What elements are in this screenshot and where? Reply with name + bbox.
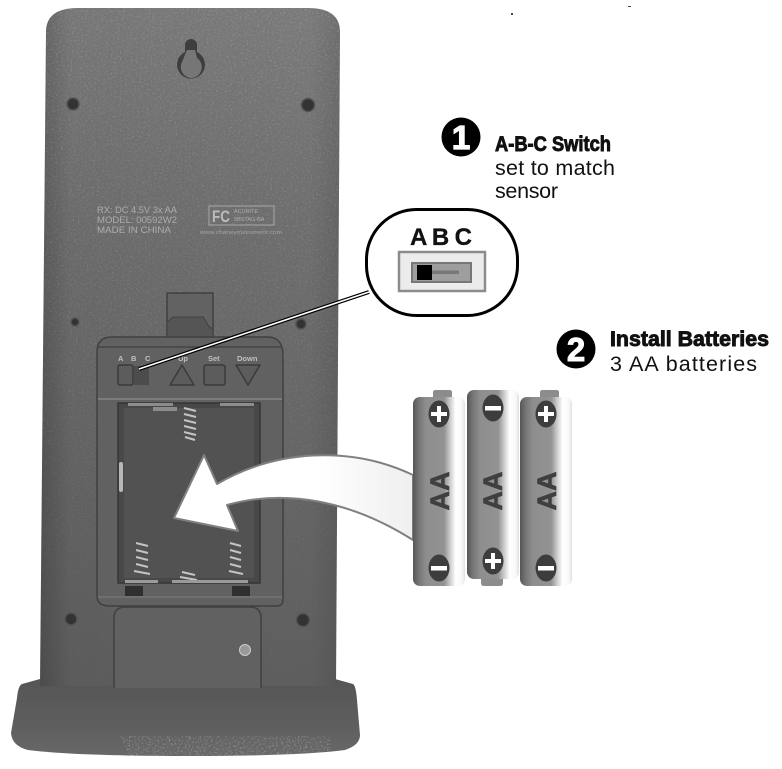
rating label text: MADE IN CHINA [97, 225, 172, 236]
FCC logo: FC [212, 207, 230, 226]
lower compartment cover [114, 607, 261, 688]
button labels [118, 354, 258, 363]
button labels: Down [237, 354, 258, 363]
step 1 text: set to match [495, 156, 615, 180]
springs [134, 408, 243, 580]
controls: slide switch and buttons [118, 365, 260, 385]
FCC logo: www.chaneyinstrument.com [199, 230, 282, 236]
battery 2: AA [478, 472, 508, 510]
FCC logo: ACURITE [234, 209, 258, 215]
arrow: into battery compartment [174, 455, 413, 540]
base stand [11, 679, 360, 756]
step 2 text [610, 328, 769, 376]
rating label text [97, 205, 178, 236]
button labels: Set [208, 354, 220, 363]
button labels: B [131, 354, 137, 363]
base speckle [120, 736, 330, 756]
step 2 text: 3 AA batteries [610, 352, 757, 376]
step 1 badge: 1 [452, 119, 470, 156]
battery 3: AA [532, 472, 562, 510]
battery 1 [413, 390, 465, 586]
callout: A B C switch detail: A B C [410, 224, 472, 251]
rating label text: RX: DC 4.5V 3x AA [97, 205, 178, 216]
icon: cover screw [240, 644, 250, 656]
battery 3 [520, 390, 572, 586]
batteries [413, 390, 572, 586]
contact strip top [128, 403, 254, 411]
step 2 text: Install Batteries [610, 328, 769, 351]
button labels: Up [178, 354, 188, 363]
battery door latch tab [167, 293, 213, 340]
step 2 badge: 2 [567, 331, 585, 368]
button labels: C [145, 354, 151, 363]
battery panel [97, 337, 283, 606]
FCC logo [199, 206, 282, 236]
step 1 text: A-B-C Switch [495, 133, 611, 156]
top edge specks [511, 6, 631, 15]
battery compartment [118, 403, 260, 596]
main body [40, 8, 340, 686]
screw holes [65, 98, 314, 626]
surface speckle [42, 8, 340, 594]
callout: A B C switch detail [366, 210, 518, 316]
FCC logo: 5BSTAG-BA [234, 217, 265, 223]
device back housing [11, 8, 360, 756]
step 2 badge [556, 330, 596, 368]
button labels: A [118, 354, 124, 363]
contact strip bottom [125, 580, 248, 583]
step 1 badge [442, 118, 480, 156]
step 1 text: sensor [495, 179, 558, 203]
step 1 text [495, 133, 615, 203]
battery 1: AA [425, 472, 455, 510]
icon: keyhole mount [177, 39, 205, 79]
rating label text: MODEL: 00592W2 [97, 215, 177, 226]
battery 2 [467, 390, 519, 586]
callout leader line [139, 292, 369, 369]
